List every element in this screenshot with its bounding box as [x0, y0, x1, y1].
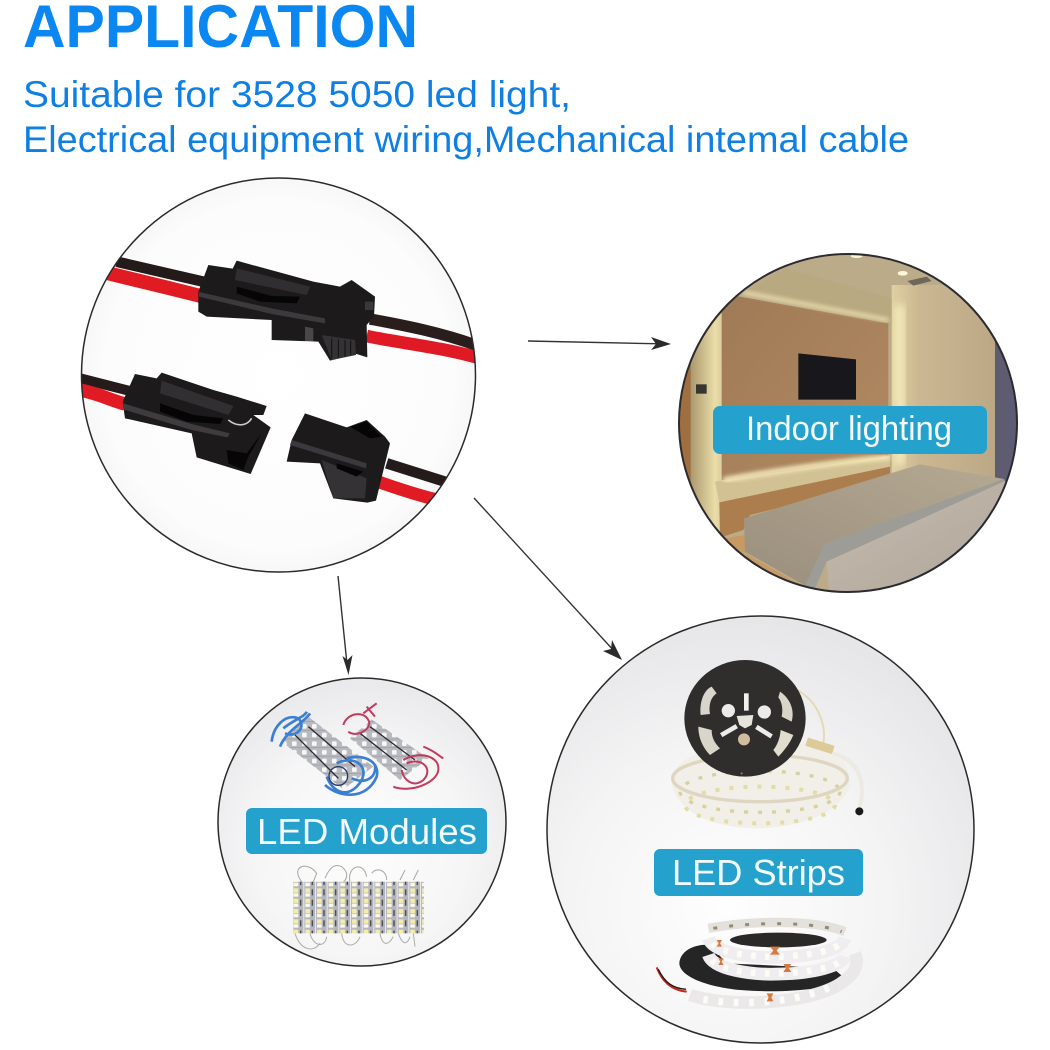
connector circle outline: [82, 178, 476, 572]
arrow: connector to LED strips: [474, 498, 622, 660]
mated connector with cables: [108, 261, 480, 361]
modules circle outline: [218, 678, 506, 966]
panel: connector photo circle: [80, 178, 480, 572]
floor: [726, 535, 798, 584]
wall switch: [696, 384, 707, 394]
arrow: connector to LED modules: [338, 576, 352, 675]
bed sheet: [826, 481, 1006, 591]
subtitle line 1: Suitable for 3528 5050 led light,: [23, 74, 571, 115]
LED strip reel: [672, 660, 863, 828]
panel: indoor lighting circle: [670, 245, 1028, 602]
modules circle background: [218, 678, 506, 966]
ceiling: [723, 255, 944, 590]
subtitle line 2: Electrical equipment wiring,Mechanical intemal cable: [23, 119, 909, 160]
connector photo background: [82, 178, 476, 572]
arrow: connector to indoor lighting: [528, 337, 671, 350]
wood wall panel: [722, 293, 888, 480]
lower connector plug: [287, 413, 445, 503]
lower connector socket: [80, 373, 271, 474]
bedroom scene: [680, 255, 1016, 591]
white module sheet: [293, 865, 424, 949]
panel: LED strips circle: [547, 616, 974, 1043]
indoor lighting label: [713, 406, 987, 454]
red wired modules: [343, 703, 443, 789]
left door: [680, 364, 691, 482]
indoor lighting label: Indoor lighting: [746, 410, 952, 448]
television: [798, 353, 856, 400]
stacked LED strips: [657, 922, 857, 1003]
panel: LED modules circle: [218, 678, 506, 966]
connector photo contents: [80, 261, 480, 503]
LED Modules label: LED Modules: [257, 811, 477, 852]
blanket: [744, 464, 1004, 586]
strips circle outline: [547, 616, 974, 1043]
indoor circle outline: [679, 254, 1017, 592]
subtitle text block: [23, 74, 909, 160]
LED Strips label: LED Strips: [672, 852, 845, 893]
strip photos: [657, 660, 863, 1003]
air vent: [907, 277, 932, 286]
blue wired modules: [272, 712, 377, 795]
light strips glow: [715, 292, 905, 502]
module photos: [272, 703, 443, 949]
blanket fold: [805, 479, 1005, 588]
left wall glow: [690, 312, 724, 532]
right wall: [892, 285, 953, 473]
strips circle background: [547, 616, 974, 1043]
ceiling lights: [851, 254, 908, 276]
shelf: [719, 467, 890, 538]
ceiling soffit: [892, 298, 893, 324]
dark curtain: [995, 342, 1016, 482]
